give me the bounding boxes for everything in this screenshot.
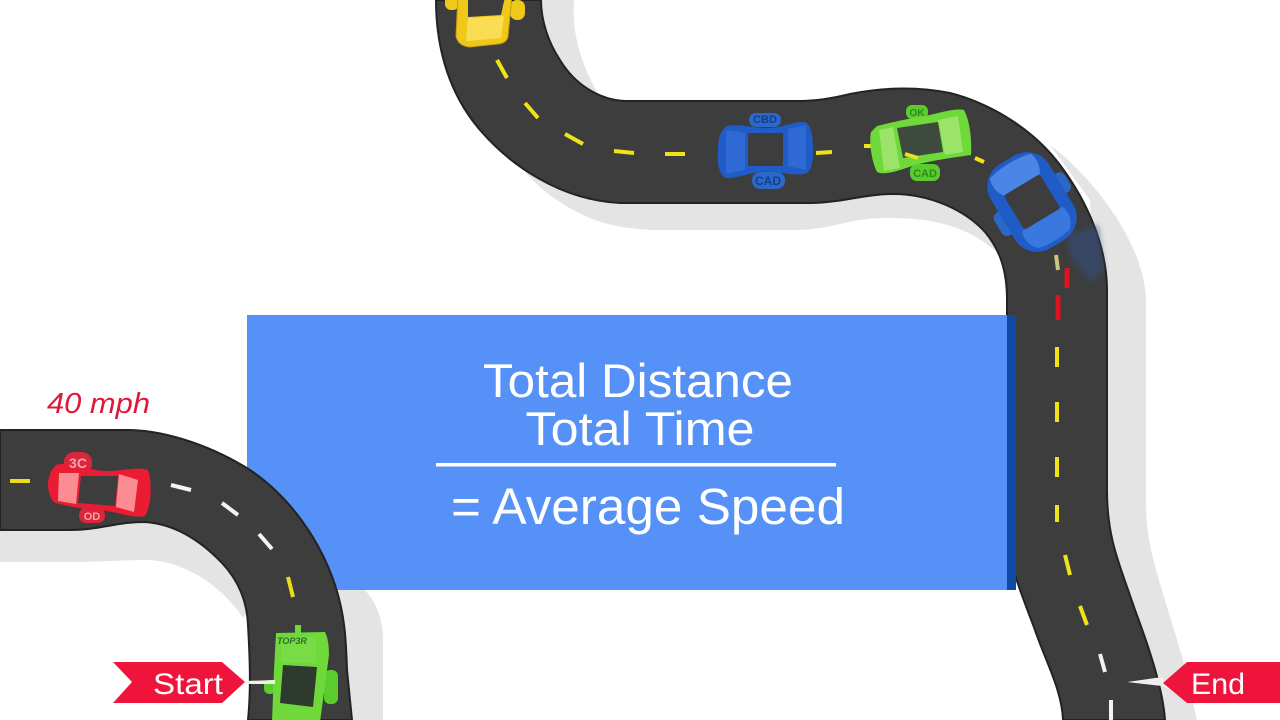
road: lower left section [0, 430, 352, 720]
wheel lettering: CAD [755, 174, 781, 188]
motion smear behind blue car [1068, 225, 1104, 282]
formula panel [247, 315, 1016, 590]
lane dashes: upper road yellow [497, 60, 1087, 625]
wheel lettering: OD [84, 511, 100, 523]
formula result: = Average Speed [451, 478, 845, 535]
lane dashes: upper road red [1058, 268, 1067, 320]
car: yellow [445, 0, 525, 47]
car: blue turning [971, 138, 1093, 266]
wheel lettering: OK [910, 108, 925, 119]
end flag [1127, 662, 1280, 703]
car lettering: TOP3R [277, 636, 307, 646]
car: blue horizontal [718, 113, 813, 189]
lane dashes: left road white [171, 485, 272, 549]
speed label: 40 mph [47, 388, 150, 420]
formula numerator line 2: Total Time [526, 402, 754, 455]
lane dashes: upper road white [1100, 654, 1111, 720]
start flag [113, 662, 275, 703]
car: green horizontal [870, 105, 971, 181]
end label: End [1191, 668, 1245, 701]
car: green start [264, 625, 338, 720]
lane dashes: left road yellow [10, 481, 293, 597]
road: upper winding section [436, 0, 1165, 720]
wheel lettering: 3C [69, 455, 87, 471]
start label: Start [153, 668, 224, 701]
formula numerator line 1: Total Distance [483, 354, 793, 407]
fraction bar [436, 463, 836, 466]
car: red [48, 452, 151, 523]
wheel lettering: CBD [753, 114, 777, 126]
wheel lettering: CAD [913, 168, 937, 180]
